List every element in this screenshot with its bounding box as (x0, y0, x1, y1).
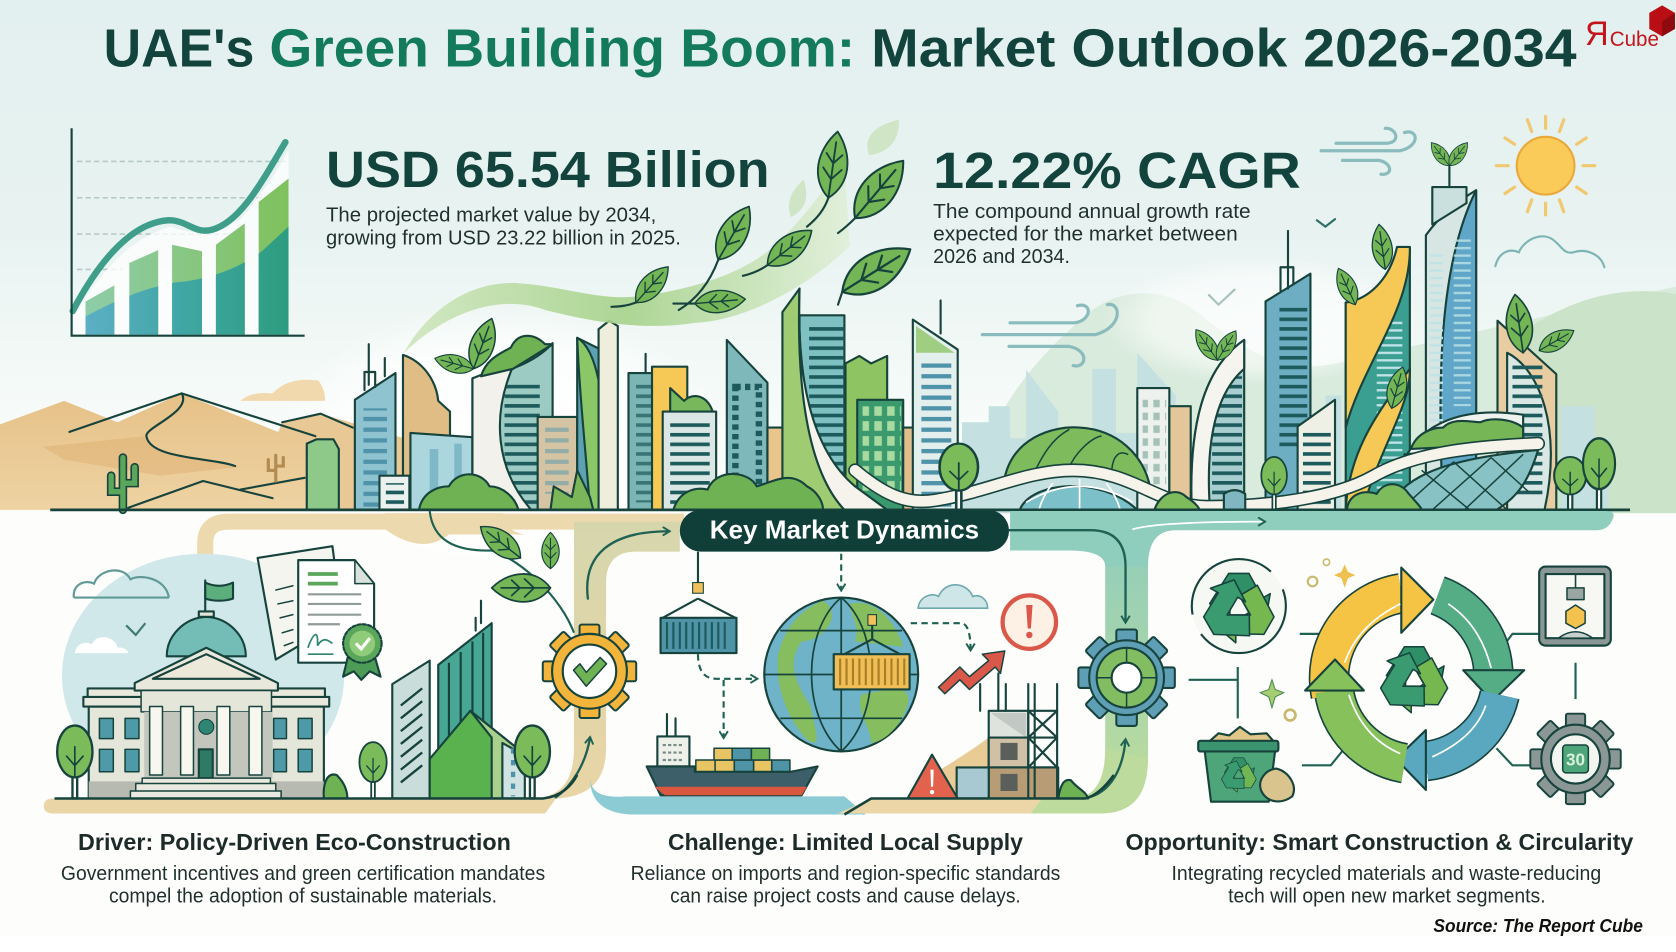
flow arrows (556, 522, 1264, 798)
icon: sun (1496, 117, 1595, 215)
title: Market Outlook 2026-2034 (871, 19, 1577, 78)
stat: CAGR: expected for the market between (933, 224, 1238, 246)
green dome (1004, 427, 1150, 487)
right city buildings (1137, 139, 1578, 510)
panel: challenge (631, 552, 1175, 908)
text: challenge: can raise project costs and cause delays. (670, 886, 1021, 908)
key market dynamics pill: Key Market Dynamics (710, 517, 979, 545)
source note: Source: The Report Cube (1433, 916, 1643, 936)
ground line (50, 509, 1630, 511)
stat: market value (326, 141, 770, 249)
icon: yellow gear with check (543, 625, 636, 718)
icon: factory and scaffold (919, 673, 1088, 798)
icon: warning triangle (907, 755, 958, 798)
stat: CAGR: 12.22% CAGR (933, 142, 1301, 199)
icon: grey gear with 30: 30 (1566, 750, 1585, 769)
title: Green Building Boom: (269, 19, 855, 78)
icon: circular economy ring (1305, 568, 1524, 790)
icon: globe with container (764, 598, 918, 751)
city skyline background (278, 257, 1676, 572)
icon: blue gear (1078, 629, 1175, 726)
left city buildings (307, 321, 786, 510)
icon: rising cost arrow (938, 651, 1005, 694)
glass canopy with roof garden (1020, 413, 1538, 510)
icon: hanging container (661, 552, 736, 653)
icon: 3D printer (1539, 567, 1611, 646)
stat: CAGR: The compound annual growth rate (933, 201, 1251, 223)
ground line (844, 775, 1114, 815)
text: challenge (631, 829, 1060, 908)
green ribbon with leaves (404, 120, 920, 377)
icon: cactus (111, 455, 283, 510)
wavy white roof band (855, 444, 1538, 507)
panel: driver (55, 511, 636, 908)
text: opportunity (1126, 829, 1633, 908)
dashed supply arrows (698, 554, 971, 738)
stat: market value: USD 65.54 Billion (326, 141, 770, 198)
flow bands connecting the sections (44, 511, 1614, 815)
icon: recycling circle (1192, 559, 1286, 653)
main swoosh tower and central buildings (782, 289, 958, 510)
trees and bushes along skyline (419, 438, 1615, 510)
icon: sparkles (1260, 559, 1355, 720)
title (104, 19, 1577, 78)
text: opportunity: Opportunity: Smart Construction & Circularity (1126, 829, 1633, 855)
icon: bird and small cloud (75, 623, 145, 653)
text: challenge: Challenge: Limited Local Supply (668, 829, 1023, 855)
icon: cloud (74, 570, 169, 598)
panel: opportunity (1126, 559, 1633, 908)
clouds and birds in the sky (1209, 219, 1604, 305)
stat: market value: growing from USD 23.22 billion in 2025. (326, 227, 681, 249)
text: opportunity: Integrating recycled materials and waste-reducing (1171, 863, 1601, 885)
stat: market value: The projected market value by 2034, (326, 204, 656, 226)
text: driver: Driver: Policy-Driven Eco-Construction (78, 829, 511, 855)
icon: certificate documents (258, 546, 382, 680)
line and bar chart (72, 128, 305, 342)
logo: RCube (1585, 5, 1675, 53)
logo: RCube: Я (1585, 15, 1609, 53)
icon: grey gear with 30 (1530, 714, 1621, 804)
text: driver: Government incentives and green certification mandates (61, 863, 545, 885)
text: driver (61, 829, 545, 908)
text: driver: compel the adoption of sustainable materials. (109, 886, 497, 908)
icon: green tower (392, 601, 525, 798)
trees and ground (55, 726, 577, 798)
icon: wind top (1321, 128, 1415, 174)
icon: cloud (918, 585, 988, 608)
government building scene background (62, 554, 344, 797)
logo: RCube: Cube (1610, 27, 1659, 51)
icon: recycling bin (1198, 727, 1294, 802)
text: challenge: Reliance on imports and region-specific standards (631, 863, 1060, 885)
stat: CAGR: 2026 and 2034. (933, 246, 1070, 268)
text: opportunity: tech will open new market segments. (1228, 886, 1546, 908)
desert dunes (0, 380, 513, 510)
icon: warning circle (1003, 595, 1056, 649)
connector lines (1189, 634, 1576, 765)
vine with leaves (430, 511, 574, 633)
stat: CAGR (933, 142, 1301, 268)
icon: cargo ship (647, 714, 818, 795)
title: UAE's (104, 19, 254, 78)
wind mid (982, 304, 1117, 366)
icon: government building (83, 580, 329, 798)
key market dynamics pill (680, 510, 1009, 552)
